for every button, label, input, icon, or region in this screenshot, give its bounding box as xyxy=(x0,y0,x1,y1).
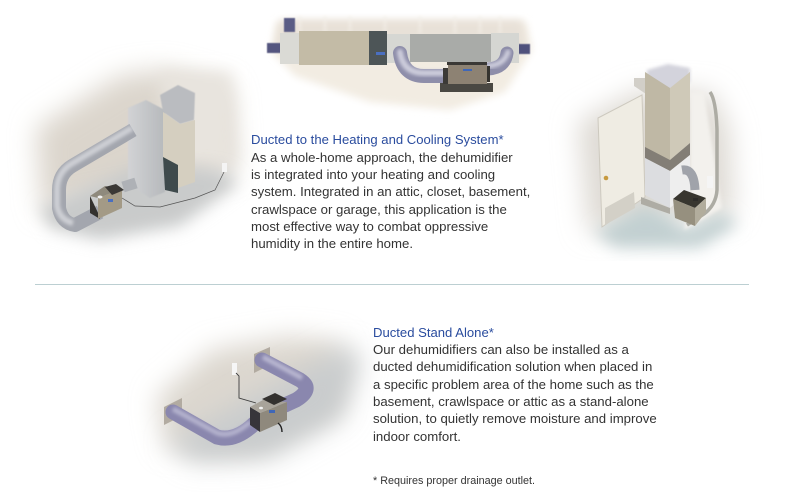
text block: ducted to the heating and cooling system: crawlspace or garage, this application is the xyxy=(251,202,507,217)
text block: ducted to the heating and cooling system: As a whole-home approach, the dehumidifier xyxy=(251,150,513,165)
text block: ducted to the heating and cooling system xyxy=(251,132,530,251)
text block: ducted stand alone: ducted dehumidification solution when placed in xyxy=(373,359,652,374)
text block: ducted stand alone: a specific problem area of the home such as the xyxy=(373,377,654,392)
text block: ducted to the heating and cooling system: Ducted to the Heating and Cooling System* xyxy=(251,132,504,147)
illustration: dehumidifier beside closet air handler, right xyxy=(578,64,738,248)
text block: ducted stand alone: basement, crawlspace or attic as a stand-alone xyxy=(373,394,649,409)
text block: ducted stand alone: solution, to quietly remove moisture and improve xyxy=(373,411,657,426)
horizontal rule xyxy=(35,284,749,285)
text block: ducted stand alone: indoor comfort. xyxy=(373,429,461,444)
illustration: stand-alone ducted dehumidifier, bottom xyxy=(156,336,362,462)
text block: ducted to the heating and cooling system: humidity in the entire home. xyxy=(251,236,413,251)
text block: ducted stand alone: Our dehumidifiers can also be installed as a xyxy=(373,342,629,357)
text block: ducted stand alone: Ducted Stand Alone* xyxy=(373,324,494,340)
text block: ducted to the heating and cooling system: most effective way to combat oppressive xyxy=(251,219,488,234)
text block: ducted to the heating and cooling system: is integrated into your heating and cooling xyxy=(251,167,495,182)
text block: ducted to the heating and cooling system: system. Integrated in an attic, closet, basement, xyxy=(251,184,530,199)
illustration: dehumidifier ducted to furnace, left xyxy=(36,70,238,240)
illustration: heating and cooling system with dehumidifier, top xyxy=(267,16,532,110)
text block: ducted stand alone xyxy=(373,324,657,444)
footnote: * Requires proper drainage outlet. xyxy=(373,475,535,487)
